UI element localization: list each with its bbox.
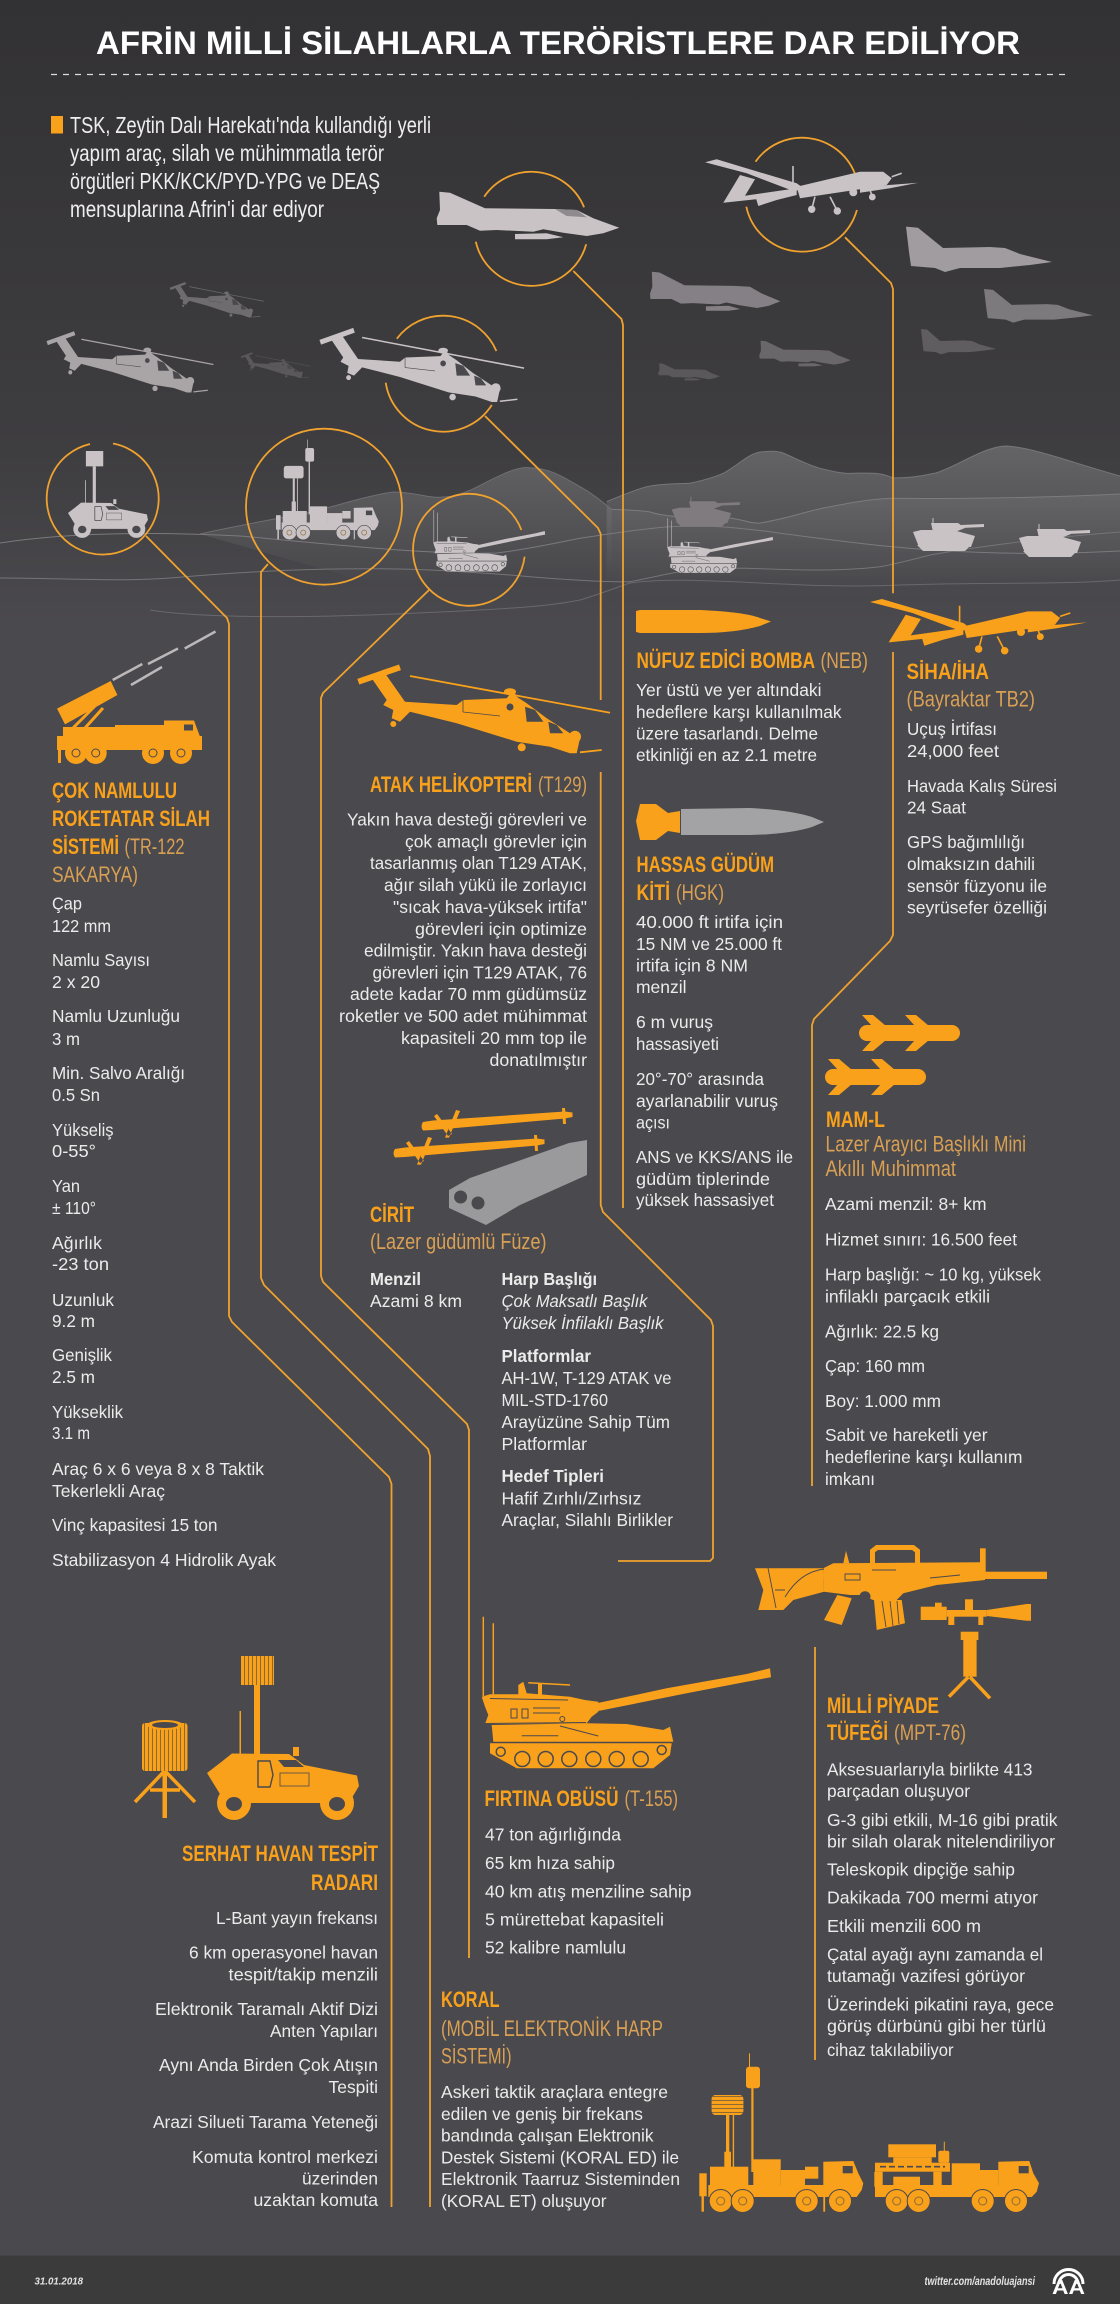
range [370, 1269, 462, 1311]
panel: Serhat radar [135, 1656, 378, 2210]
heading: KİTİ [636, 880, 670, 905]
panel: NEB penetrator bomb [636, 610, 868, 765]
description: (KORAL ET) oluşuyor [441, 2191, 607, 2211]
panel: Firtina howitzer [482, 1617, 771, 1958]
specifications: 3.1 m [52, 1423, 90, 1443]
description: ağır silah yükü ile zorlayıcı [384, 875, 587, 895]
heading [906, 659, 1035, 712]
specifications: Azami menzil: 8+ km [825, 1194, 986, 1214]
heading: MİLLİ PİYADE [827, 1693, 939, 1718]
specifications: GPS bağımlılığı [907, 832, 1025, 852]
heading: NÜFUZ EDİCİ BOMBA [636, 648, 815, 673]
icon: tripod radar [135, 1720, 195, 1818]
icon: guided bomb [636, 804, 824, 840]
heading [370, 1202, 546, 1254]
specifications: Aynı Anda Birden Çok Atışın [159, 2055, 378, 2075]
description: Destek Sistemi (KORAL ED) ile [441, 2148, 679, 2168]
specifications: Boy: 1.000 mm [825, 1391, 941, 1411]
specifications: 6 km operasyonel havan [189, 1942, 378, 1962]
specifications: hedeflerine karşı kullanım [825, 1447, 1022, 1467]
helicopters [47, 283, 524, 402]
specifications: 24,000 feet [907, 741, 999, 761]
specifications: 2 x 20 [52, 972, 100, 992]
heading: Lazer Arayıcı Başlıklı Mini [826, 1132, 1026, 1156]
heading: KORAL [441, 1987, 500, 2012]
specifications: 9.2 m [52, 1311, 95, 1331]
specifications: 40 km atış menziline sahip [485, 1882, 692, 1902]
icon: rifle [755, 1548, 1047, 1630]
specifications: Yüksek İnfilaklı Başlık [502, 1313, 665, 1333]
heading: SİSTEMİ [52, 834, 119, 859]
specifications: Çatal ayağı aynı zamanda el [827, 1944, 1043, 1964]
description: Elektronik Taarruz Sisteminden [441, 2169, 680, 2189]
specifications: L-Bant yayın frekansı [216, 1908, 378, 1928]
icon: missiles and launcher [394, 1108, 587, 1225]
footer bar [0, 2256, 1120, 2304]
icon: howitzer [482, 1617, 771, 1768]
specifications: Teleskopik dipçiğe sahip [827, 1860, 1015, 1880]
specifications: 2.5 m [52, 1367, 95, 1387]
specifications: MIL-STD-1760 [502, 1390, 608, 1410]
specifications: 3 m [52, 1029, 80, 1049]
specifications: Uzunluk [52, 1290, 114, 1310]
specifications: menzil [636, 977, 686, 997]
specifications: yüksek hassasiyet [636, 1190, 774, 1210]
description [339, 810, 587, 1070]
specifications: Ağırlık: 22.5 kg [825, 1322, 939, 1342]
gray aircraft and vehicles scene [47, 159, 1093, 573]
description: roketler ve 500 adet mühimmat [339, 1006, 587, 1026]
icon: Koral ED truck [699, 2053, 863, 2212]
heading: SİSTEMİ) [441, 2044, 512, 2068]
specifications: Ağırlık [52, 1233, 102, 1253]
howitzers [433, 510, 773, 573]
range: Azami 8 km [370, 1291, 462, 1311]
specifications: G-3 gibi etkili, M-16 gibi pratik [827, 1810, 1058, 1830]
specifications: Etkili menzili 600 m [827, 1916, 981, 1936]
description: çok amaçlı görevler için [405, 832, 587, 852]
specifications: 0.5 Sn [52, 1085, 100, 1105]
specifications: Genişlik [52, 1345, 112, 1365]
specifications [52, 894, 276, 1570]
specifications: Çap: 160 mm [825, 1356, 925, 1376]
intro text: yapım araç, silah ve mühimmatla terör [70, 140, 384, 166]
icon: grip bipod [949, 1632, 990, 1698]
description: tasarlanmış olan T129 ATAK, [370, 853, 587, 873]
heading: (TR-122 [124, 834, 184, 859]
description: edilen ve geniş bir frekans [441, 2104, 643, 2124]
tanks [672, 497, 1090, 557]
logo: AA [1052, 2270, 1085, 2299]
description: donatılmıştır [490, 1050, 587, 1070]
specifications: üzerinden [302, 2168, 378, 2188]
icon: drone [870, 599, 1087, 654]
description: görevleri için T129 ATAK, 76 [372, 962, 587, 982]
specifications: uzaktan komuta [254, 2190, 378, 2210]
specifications: Aksesuarlarıyla birlikte 413 [827, 1760, 1032, 1780]
description: üzere tasarlandı. Delme [636, 724, 818, 744]
heading: (HGK) [676, 880, 724, 905]
heading [826, 1107, 1026, 1181]
heading: Akıllı Muhimmat [826, 1156, 956, 1181]
panel: T129 ATAK helicopter [339, 667, 610, 1070]
specifications: güdüm tiplerinde [636, 1169, 770, 1189]
heading [827, 1693, 966, 1745]
specifications: bir silah olarak nitelendiriliyor [827, 1832, 1055, 1852]
specifications: tespit/takip menzili [228, 1964, 378, 1984]
specifications: Platformlar [502, 1434, 587, 1454]
specifications: imkanı [825, 1469, 875, 1489]
orange circles [47, 138, 857, 606]
description [636, 680, 842, 765]
specifications: Komuta kontrol merkezi [192, 2147, 378, 2167]
specifications: Harp başlığı: ~ 10 kg, yüksek [825, 1264, 1041, 1284]
heading: TÜFEĞİ [827, 1720, 888, 1745]
specifications: Min. Salvo Aralığı [52, 1063, 185, 1083]
specifications: Platformlar [502, 1346, 591, 1366]
specifications: Üzerindeki pikatini raya, gece [827, 1994, 1054, 2014]
heading: FIRTINA OBÜSÜ [484, 1786, 618, 1811]
description: edilmiştir. Yakın hava desteği [364, 940, 587, 960]
specifications: Hedef Tipleri [502, 1466, 604, 1486]
heading: (MPT-76) [894, 1720, 966, 1745]
heading: (Lazer güdümlü Füze) [370, 1229, 546, 1254]
specifications: hassasiyeti [636, 1034, 719, 1054]
specifications: parçadan oluşuyor [827, 1781, 970, 1801]
description: Askeri taktik araçlara entegre [441, 2082, 668, 2102]
icon: Koral ET truck [874, 2142, 1039, 2212]
specifications: 47 ton ağırlığında [485, 1824, 621, 1844]
specifications: Yan [52, 1176, 80, 1196]
specifications: 65 km hıza sahip [485, 1853, 615, 1873]
specifications: Arayüzüne Sahip Tüm [502, 1412, 670, 1432]
heading: ÇOK NAMLULU [52, 778, 177, 803]
heading: SERHAT HAVAN TESPİT [182, 1841, 378, 1866]
specifications: 5 mürettebat kapasiteli [485, 1910, 664, 1930]
specifications: Harp Başlığı [502, 1269, 597, 1289]
specifications: infilaklı parçacık etkili [825, 1286, 990, 1306]
title: AFRİN MİLLİ SİLAHLARLA TERÖRİSTLERE DAR EDİLİYOR [96, 25, 1020, 61]
specifications: 0-55° [52, 1141, 96, 1161]
specifications: Elektronik Taramalı Aktif Dizi [155, 1999, 378, 2019]
specifications: ANS ve KKS/ANS ile [636, 1147, 793, 1167]
specifications: Uçuş İrtifası [907, 719, 997, 739]
specifications: görüş dürbünü gibi her türlü [827, 2016, 1046, 2036]
specifications: ± 110° [52, 1198, 96, 1218]
heading: ROKETATAR SİLAH [52, 806, 210, 831]
intro text: mensuplarına Afrin'i dar ediyor [70, 196, 324, 222]
specifications: 52 kalibre namlulu [485, 1938, 626, 1958]
armored radar vehicle [68, 451, 148, 538]
heading: SAKARYA) [52, 862, 138, 887]
heading [52, 778, 210, 887]
specifications [907, 719, 1057, 918]
logo: AA: AA [1052, 2277, 1085, 2299]
specifications: Sabit ve hareketli yer [825, 1425, 988, 1445]
specifications: Araçlar, Silahlı Birlikler [502, 1510, 673, 1530]
specifications: Hizmet sınırı: 16.500 feet [825, 1230, 1017, 1250]
description: Yakın hava desteği görevleri ve [347, 810, 587, 830]
heading: CİRİT [370, 1202, 414, 1227]
specifications: Dakikada 700 mermi atıyor [827, 1888, 1038, 1908]
source link: twitter.com/anadoluajansi [924, 2274, 1036, 2288]
intro text: TSK, Zeytin Dalı Harekatı'nda kullandığı yerli [70, 112, 431, 138]
F-4 jets [437, 192, 851, 380]
icon: bomb [636, 610, 771, 633]
heading: (T-155) [624, 1786, 678, 1811]
date: 31.01.2018 [34, 2276, 83, 2288]
icon: scope [921, 1599, 1031, 1625]
electronic warfare truck [276, 440, 379, 540]
heading: MAM-L [826, 1107, 885, 1132]
description: görevleri için optimize [415, 919, 587, 939]
description [441, 2082, 680, 2211]
description: hedeflere karşı kullanılmak [636, 702, 842, 722]
icon: radar vehicle [207, 1656, 359, 1820]
specifications: Vinç kapasitesi 15 ton [52, 1515, 218, 1535]
connector lines [146, 237, 893, 2207]
specifications: Namlu Sayısı [52, 950, 150, 970]
specifications: Anten Yapıları [270, 2021, 378, 2041]
heading: (MOBİL ELEKTRONİK HARP [441, 2016, 663, 2041]
specifications: 15 NM ve 25.000 ft [636, 934, 782, 954]
panel: rocket launcher TR-122 [52, 632, 276, 1570]
F-16 jets [906, 227, 1093, 354]
icon: rocket launcher truck [57, 632, 216, 764]
specifications: Çap [52, 894, 82, 914]
panel: Bayraktar TB2 [870, 599, 1087, 918]
specifications: tutamağı vazifesi görüyor [827, 1966, 1025, 1986]
heading: ATAK HELİKOPTERİ [370, 772, 532, 797]
specifications [827, 1760, 1058, 2060]
description: "sıcak hava-yüksek irtifa" [393, 897, 587, 917]
orange marker [51, 116, 63, 134]
panel: MPT-76 rifle [755, 1548, 1058, 2060]
specifications: irtifa için 8 NM [636, 956, 748, 976]
specifications [825, 1194, 1041, 1489]
specifications: 6 m vuruş [636, 1012, 713, 1032]
specifications: cihaz takılabiliyor [827, 2040, 954, 2060]
description: kapasiteli 20 mm top ile [401, 1028, 587, 1048]
heading [182, 1841, 378, 1895]
panel: Cirit missile [370, 1108, 673, 1530]
specifications [485, 1824, 692, 1958]
specifications: 24 Saat [907, 798, 966, 818]
drone [705, 159, 918, 215]
specifications: Havada Kalış Süresi [907, 776, 1057, 796]
specifications: sensör füzyonu ile [907, 876, 1047, 896]
specifications: Araç 6 x 6 veya 8 x 8 Taktik [52, 1459, 264, 1479]
range: Menzil [370, 1269, 421, 1289]
specifications [636, 912, 793, 1210]
specifications: ayarlanabilir vuruş [636, 1091, 778, 1111]
heading [441, 1987, 663, 2068]
specifications: -23 ton [52, 1254, 109, 1274]
heading: (Bayraktar TB2) [906, 686, 1035, 712]
heading [636, 852, 774, 905]
specifications: AH-1W, T-129 ATAK ve [502, 1368, 672, 1388]
specifications [502, 1269, 673, 1530]
heading: HASSAS GÜDÜM [636, 852, 774, 877]
heading: RADARI [311, 1870, 378, 1895]
specifications: Tespiti [328, 2077, 378, 2097]
specifications: açısı [636, 1112, 670, 1132]
specifications: 40.000 ft irtifa için [636, 912, 783, 932]
heading: (T129) [538, 772, 587, 797]
specifications: seyrüsefer özelliği [907, 898, 1047, 918]
specifications: Hafif Zırhlı/Zırhsız [502, 1488, 642, 1508]
description: Yer üstü ve yer altındaki [636, 680, 822, 700]
specifications: Stabilizasyon 4 Hidrolik Ayak [52, 1550, 276, 1570]
specifications: 20°-70° arasında [636, 1069, 764, 1089]
specifications: Çok Maksatlı Başlık [502, 1291, 649, 1311]
specifications: Tekerlekli Araç [52, 1481, 165, 1501]
panel: HGK guidance kit [636, 804, 824, 1210]
specifications [153, 1908, 378, 2210]
specifications: Arazi Silueti Tarama Yeteneği [153, 2112, 378, 2132]
intro text [51, 112, 431, 222]
specifications: 122 mm [52, 916, 111, 936]
specifications: Yükseklik [52, 1402, 123, 1422]
icon: attack helicopter [358, 667, 610, 753]
specifications: olmaksızın dahili [907, 854, 1035, 874]
heading: SİHA/İHA [906, 659, 989, 684]
specifications: Namlu Uzunluğu [52, 1006, 180, 1026]
description: bandında çalışan Elektronik [441, 2126, 654, 2146]
specifications: Yükseliş [52, 1120, 114, 1140]
description: etkinliği en az 2.1 metre [636, 745, 817, 765]
panel: MAM-L munition [825, 1015, 1041, 1489]
panel: Koral electronic warfare [441, 1987, 1039, 2212]
heading: (NEB) [820, 648, 868, 673]
description: adete kadar 70 mm güdümsüz [350, 984, 587, 1004]
icon: mini munitions [825, 1015, 960, 1095]
intro text: örgütleri PKK/KCK/PYD-YPG ve DEAŞ [70, 168, 380, 194]
mountains landscape [0, 446, 1120, 617]
